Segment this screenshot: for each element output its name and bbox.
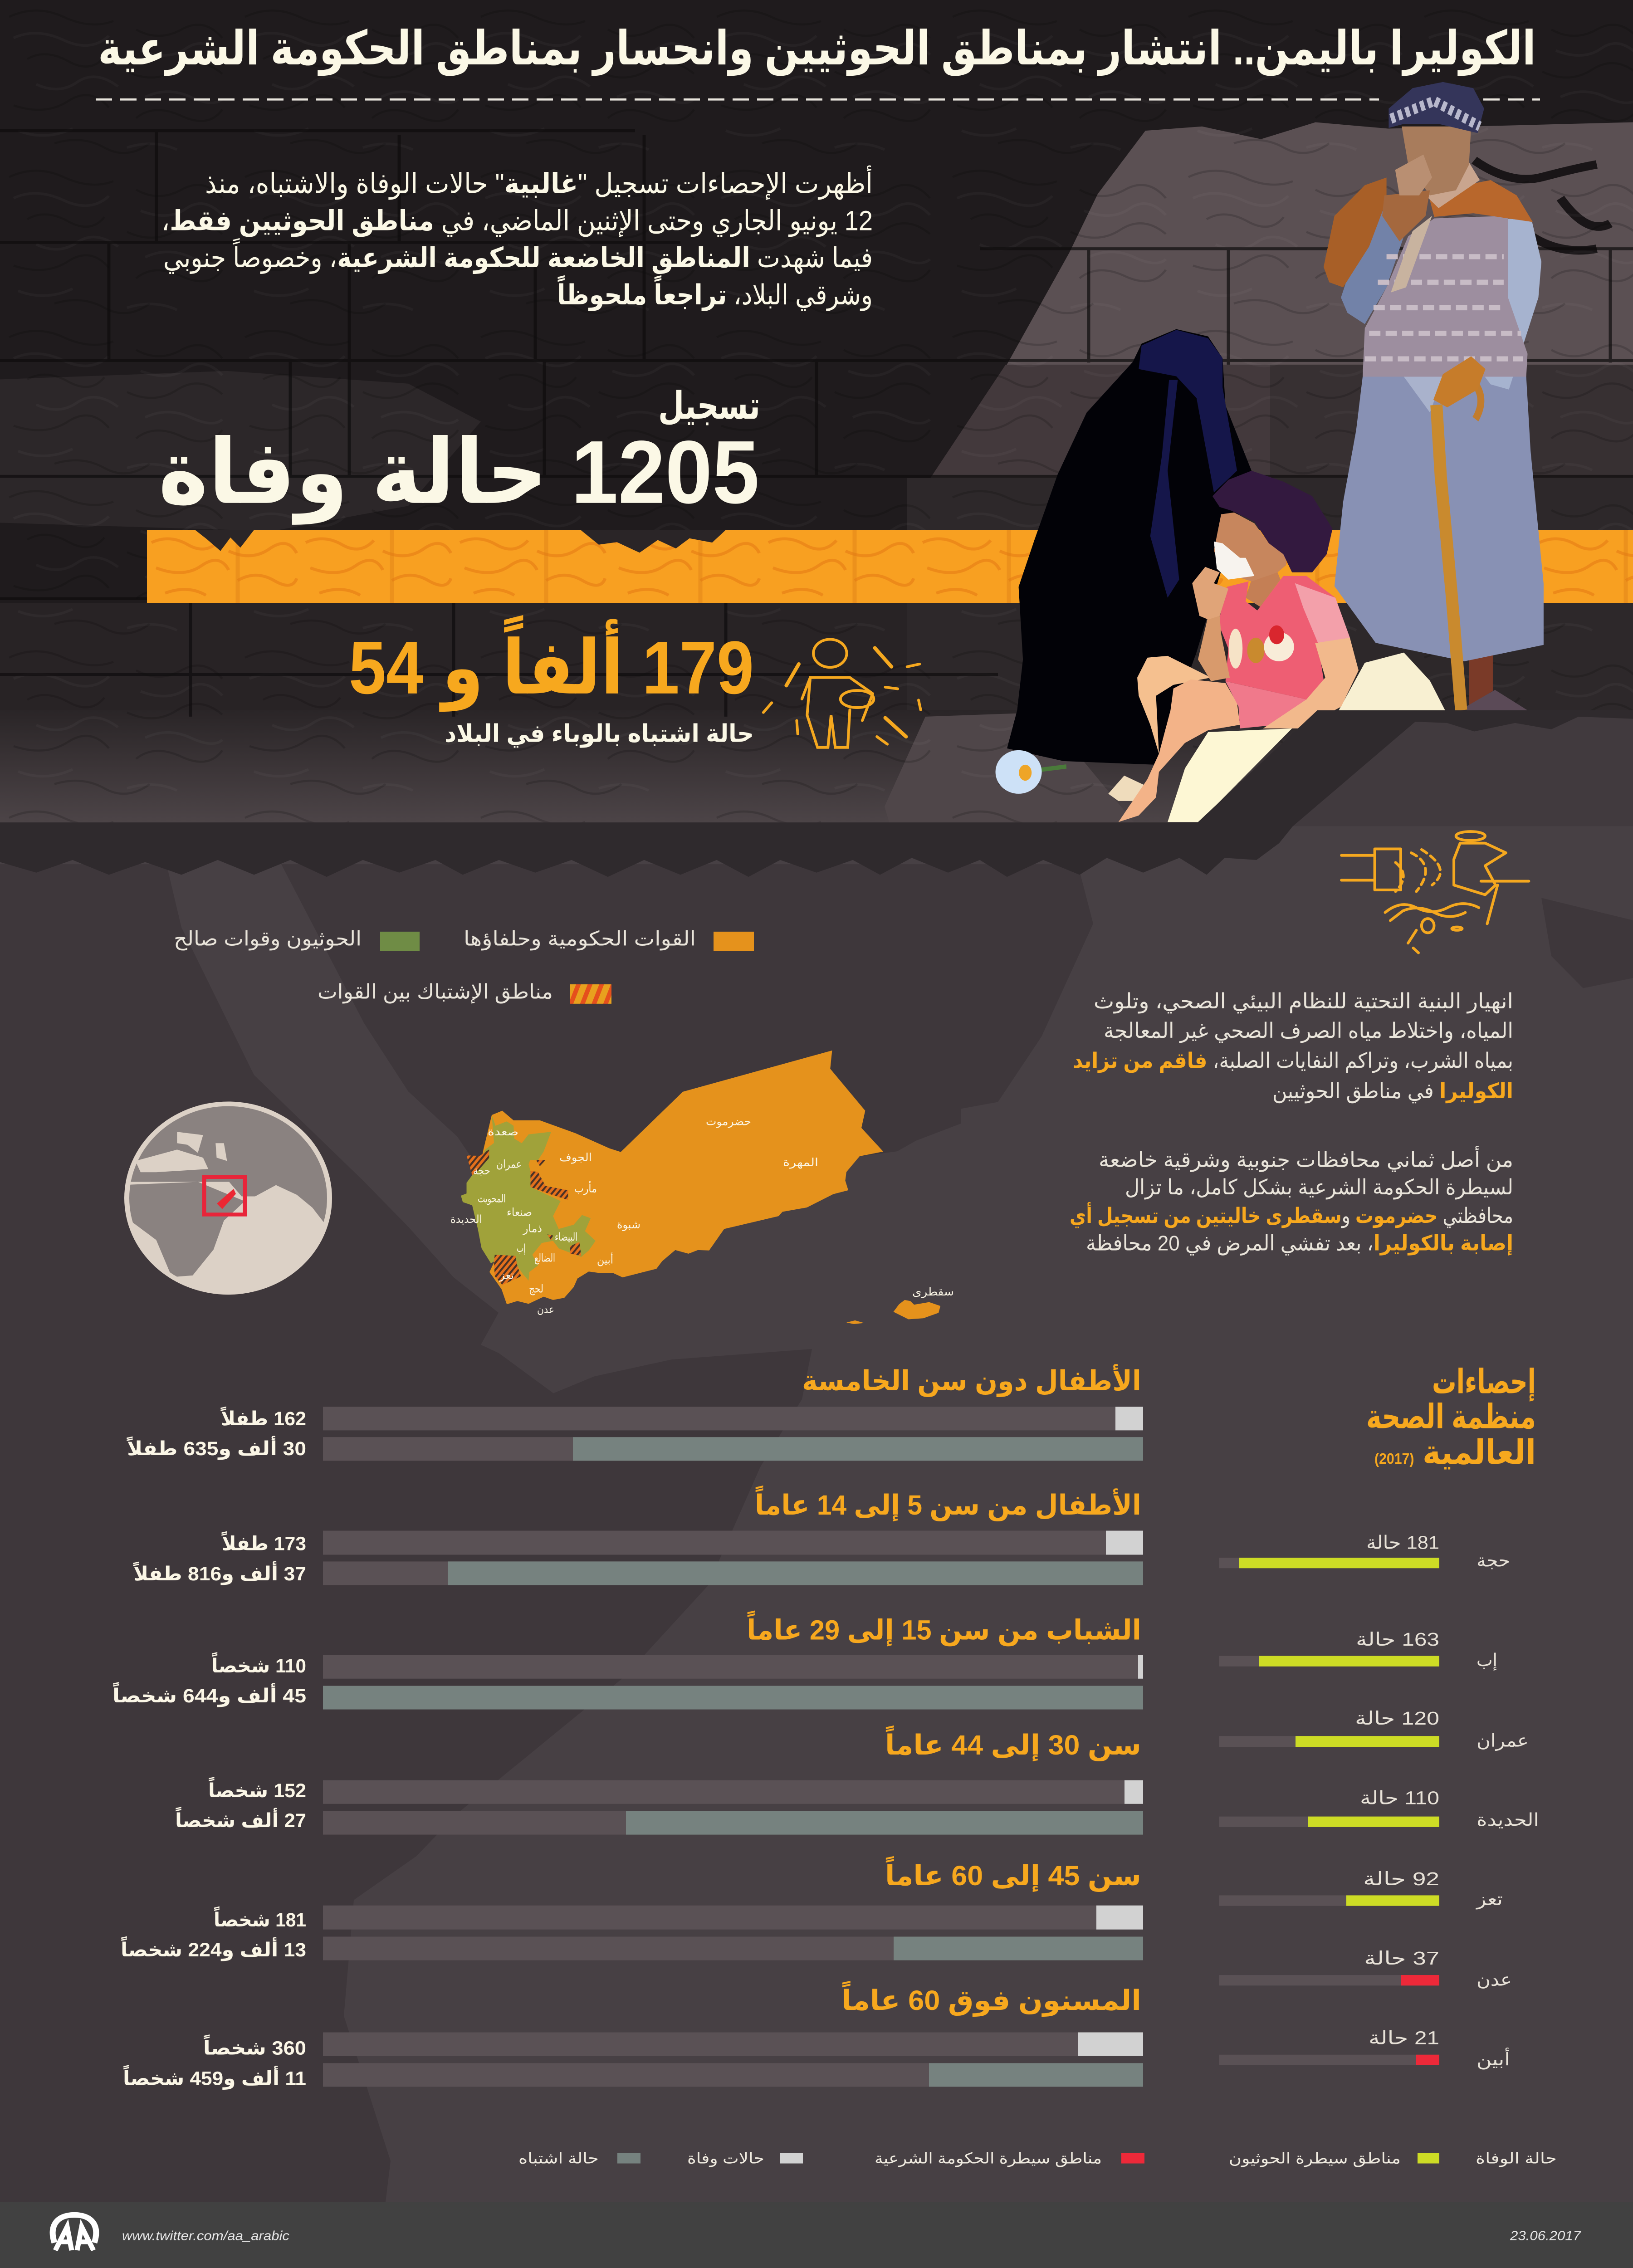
chart: ages 45 to 60: سن 45 إلى 60 عاماً — [885, 1856, 1141, 1892]
stone wall brick lines — [0, 131, 1633, 717]
chart: under five: 162 طفلاً — [220, 1406, 306, 1430]
bar: Aden: عدن — [1477, 1970, 1512, 1989]
figure: girl with mask — [1108, 471, 1359, 822]
chart: ages 5 to 14: الأطفال من سن 5 إلى 14 عاماً — [755, 1486, 1141, 1522]
chart legend: حالة الوفاة — [1476, 2151, 1557, 2167]
chart: under five: الأطفال دون سن الخامسة — [802, 1364, 1141, 1397]
icon: sewage pipe and woman at water — [1341, 831, 1529, 953]
map region labels: شبوة — [617, 1219, 640, 1232]
map region labels — [450, 1115, 954, 1316]
text block: provinces free of cholera — [1070, 1146, 1513, 1256]
photo background: stone wall — [0, 0, 1633, 822]
WHO statistics heading: منظمة الصحة — [1366, 1398, 1536, 1436]
map: clash zones — [467, 1149, 581, 1285]
figure: old man — [1324, 82, 1544, 710]
headline stat: suspected cases: حالة اشتباه بالوباء في البلاد — [445, 720, 754, 748]
chart: over 60: 360 شخصاً — [203, 2034, 306, 2059]
map region labels: المهرة — [783, 1156, 818, 1169]
map: Socotra islands — [846, 1300, 940, 1324]
bar: Ibb: 163 حالة — [1356, 1629, 1439, 1650]
map region labels: البيضاء — [555, 1231, 577, 1243]
bar: Hodeidah — [1219, 1788, 1539, 1830]
legend: Houthis: الحوثيون وقوات صالح — [174, 927, 362, 951]
chart legend: حالة اشتباه — [518, 2151, 599, 2167]
map region labels: تعز — [499, 1270, 514, 1282]
map region labels: لحج — [529, 1283, 543, 1295]
bar: Amran: 120 حالة — [1355, 1708, 1439, 1729]
bar: Ibb: إب — [1477, 1650, 1497, 1670]
chart: ages 5 to 14: 173 طفلاً — [221, 1531, 306, 1554]
map region labels: عدن — [537, 1304, 554, 1316]
text block: provinces free of cholera: من أصل ثماني محافظات جنوبية وشرقية خاضعة — [1099, 1146, 1513, 1172]
bar: Abyan: 21 حالة — [1369, 2028, 1439, 2048]
chart: ages 5 to 14 — [133, 1486, 1143, 1585]
footer twitter link: www.twitter.com/aa_arabic — [122, 2229, 289, 2243]
map region labels: حضرموت — [706, 1115, 751, 1128]
legend: government forces: القوات الحكومية وحلفاؤها — [464, 927, 696, 951]
map region labels: مأرب — [574, 1180, 597, 1195]
bar: Amran — [1219, 1708, 1529, 1751]
map region labels: الجوف — [559, 1151, 592, 1164]
bar: Hajjah: 181 حالة — [1366, 1532, 1439, 1553]
map region labels: الحديدة — [450, 1213, 482, 1226]
province death bars — [1219, 1532, 1539, 2070]
locator globe — [124, 1101, 332, 1295]
dashed divider — [96, 98, 1540, 101]
chart: over 60: المسنون فوق 60 عاماً — [841, 1981, 1141, 2017]
bar: Taiz — [1219, 1869, 1503, 1909]
text block: provinces free of cholera: إصابة بالكوليرا، بعد تفشي المرض في 20 محافظة — [1086, 1232, 1513, 1256]
chart: ages 45 to 60: 181 شخصاً — [214, 1906, 306, 1931]
corner wedge inner panel — [1288, 714, 1633, 826]
orange band — [147, 530, 1633, 603]
bar: Hajjah — [1219, 1532, 1510, 1570]
chart: ages 15 to 29: 45 ألف و644 شخصاً — [112, 1682, 306, 1707]
map region labels: الضالع — [534, 1252, 555, 1265]
bar: Hodeidah: الحديدة — [1477, 1809, 1539, 1830]
chart: over 60 — [123, 1981, 1143, 2090]
chart: ages 45 to 60 — [121, 1856, 1143, 1961]
map region labels: ذمار — [522, 1222, 542, 1235]
WHO statistics heading: إحصاءات — [1432, 1363, 1536, 1402]
chart legend: مناطق سيطرة الحكومة الشرعية — [875, 2151, 1102, 2167]
bar: Aden: 37 حالة — [1364, 1948, 1439, 1969]
chart: ages 15 to 29: الشباب من سن 15 إلى 29 عاماً — [747, 1610, 1141, 1647]
WHO statistics heading: العالمية (2017) — [1374, 1433, 1536, 1471]
map: government areas — [476, 1051, 883, 1304]
chart: over 60: 11 ألف و459 شخصاً — [123, 2065, 306, 2090]
map region labels: عمران — [496, 1158, 522, 1171]
figure: woman in niqab — [1007, 329, 1252, 765]
chart legend — [518, 2151, 1557, 2167]
text block: infrastructure collapse: بمياه الشرب، وتراكم النفايات الصلبة، فاقم من تزايد — [1073, 1049, 1513, 1073]
icon: AA logo — [53, 2215, 96, 2250]
bar: Hodeidah: 110 حالة — [1360, 1788, 1439, 1808]
WHO statistics heading — [1366, 1363, 1536, 1471]
legend: clash zones: مناطق الإشتباك بين القوات — [318, 980, 553, 1004]
chart: ages 15 to 29: 110 شخصاً — [211, 1652, 306, 1677]
headline stat: deaths: 1205 حالة وفاة — [158, 423, 759, 525]
map region labels: المحويت — [478, 1193, 506, 1205]
bar: Abyan — [1219, 2028, 1510, 2070]
icon: infected person with bacteria — [763, 639, 921, 748]
chart: ages 5 to 14: 37 ألف و816 طفلاً — [133, 1561, 306, 1585]
text block: infrastructure collapse: الكوليرا في مناطق الحوثيين — [1272, 1080, 1513, 1104]
map region labels: حجة — [473, 1165, 490, 1177]
chart: ages 45 to 60: 13 ألف و224 شخصاً — [121, 1936, 306, 1961]
chart: ages 30 to 44: سن 30 إلى 44 عاماً — [885, 1725, 1141, 1761]
bar: Aden — [1219, 1948, 1512, 1989]
map region labels: سقطرى — [912, 1286, 954, 1299]
chart legend: حالات وفاة — [687, 2151, 764, 2167]
icon: flower — [996, 750, 1066, 794]
bar: Hajjah: حجة — [1477, 1550, 1510, 1570]
headline stat: suspected cases — [349, 615, 754, 748]
text block: infrastructure collapse: المياه، واختلاط مياه الصرف الصحي غير المعالجة — [1104, 1019, 1513, 1043]
chart: ages 15 to 29 — [112, 1610, 1143, 1710]
map region labels: إب — [517, 1242, 526, 1255]
chart legend: مناطق سيطرة الحوثيون — [1229, 2151, 1401, 2167]
map region labels: أبين — [597, 1252, 613, 1266]
map: Houthi areas — [461, 1115, 596, 1281]
intro text block: أظهرت الإحصاءات تسجيل "غالبية" حالات الوفاة والاشتباه، منذ — [205, 165, 873, 200]
footer date: 23.06.2017 — [1510, 2229, 1581, 2243]
bar: Ibb — [1219, 1629, 1497, 1670]
map region labels: صنعاء — [507, 1206, 532, 1218]
intro text block: وشرقي البلاد، تراجعاً ملحوظاً — [557, 275, 873, 311]
bar: Abyan: أبين — [1477, 2048, 1510, 2070]
headline stat: deaths: تسجيل — [658, 385, 760, 427]
figures: woman and girl — [996, 329, 1359, 822]
map region labels: صعدة — [488, 1126, 518, 1138]
footer bar — [0, 2202, 1633, 2268]
intro text block — [161, 165, 873, 311]
text block: provinces free of cholera: محافظتي حضرموت وسقطرى خاليتين من تسجيل أي — [1070, 1202, 1513, 1228]
map legend — [174, 927, 754, 1004]
chart: under five — [127, 1364, 1143, 1461]
text block: infrastructure collapse: انهيار البنية التحتية للنظام البيئي الصحي، وتلوث — [1094, 990, 1513, 1014]
text block: infrastructure collapse — [1073, 990, 1513, 1104]
headline stat: suspected cases: 179 ألفاً و 54 — [349, 615, 754, 712]
chart: ages 30 to 44: 27 ألف شخصاً — [175, 1807, 306, 1832]
chart: ages 30 to 44: 152 شخصاً — [208, 1777, 306, 1802]
intro text block: 12 يونيو الجاري وحتى الإثنين الماضي، في مناطق الحوثيين فقط، — [161, 205, 873, 237]
dark torn band and corner wedge — [0, 710, 1633, 877]
bar: Taiz: تعز — [1476, 1889, 1503, 1909]
intro text block: فيما شهدت المناطق الخاضعة للحكومة الشرعية، وخصوصاً جنوبي — [163, 238, 873, 274]
background map silhouette: Africa and Arabia — [0, 864, 1633, 2202]
map of Yemen — [461, 1051, 940, 1324]
bar: Amran: عمران — [1477, 1730, 1529, 1751]
chart: under five: 30 ألف و635 طفلاً — [127, 1436, 306, 1460]
lower section background — [0, 822, 1633, 2268]
headline stat: deaths — [158, 385, 760, 525]
bar: Taiz: 92 حالة — [1363, 1869, 1439, 1889]
age bar charts — [112, 1364, 1143, 2090]
chart: ages 30 to 44 — [175, 1725, 1143, 1835]
text block: provinces free of cholera: لسيطرة الحكومة الشرعية بشكل كامل، ما تزال — [1125, 1176, 1513, 1199]
